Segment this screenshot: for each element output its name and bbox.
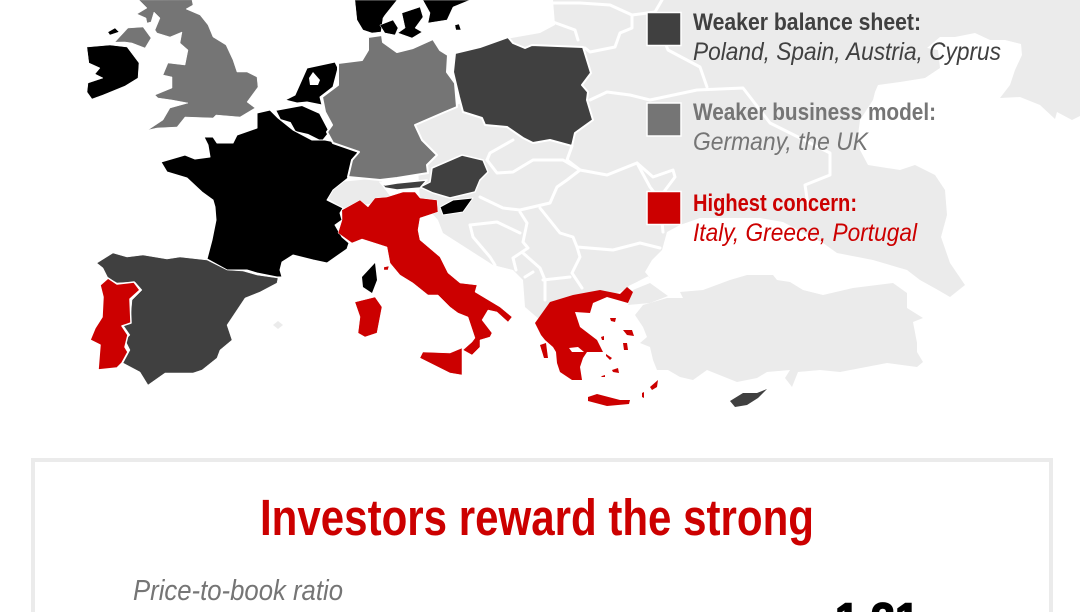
country: Poland — [453, 37, 593, 146]
panel: investors reward the strong — [33, 460, 1051, 612]
country: Portugal — [90, 278, 140, 370]
panel heading: Investors reward the strong — [260, 489, 814, 546]
inland water: IJsselmeer — [309, 72, 320, 85]
country: Cyprus — [730, 389, 767, 407]
country: Austria — [380, 155, 488, 198]
white internal borders — [470, 0, 830, 300]
country: United Kingdom — [115, 0, 258, 130]
legend item: highest concern: Italy, Greece, Portugal — [693, 219, 918, 247]
legend item: weaker business model — [647, 99, 936, 156]
legend item: highest concern: Highest concern: — [693, 190, 857, 217]
country: Germany — [322, 35, 457, 180]
legend item: highest concern — [647, 190, 918, 247]
legend item: weaker business model: Germany, the UK — [693, 128, 869, 156]
legend — [647, 9, 1001, 247]
map of Europe — [87, 0, 1080, 407]
chart label: Price-to-book ratio — [133, 575, 343, 607]
country: Italy — [338, 192, 512, 375]
legend item: weaker balance sheet: Weaker balance sheet: — [693, 9, 921, 36]
country: Greece — [535, 287, 658, 406]
legend item: weaker balance sheet — [647, 9, 1001, 66]
island: Corsica — [362, 263, 377, 293]
legend item: weaker balance sheet: Poland, Spain, Austria, Cyprus — [693, 38, 1001, 66]
country: France — [161, 110, 358, 277]
country: Netherlands — [285, 62, 338, 105]
country: Belgium — [275, 105, 330, 142]
country: Spain — [97, 253, 278, 385]
unrated countries landmass — [273, 0, 1080, 387]
country: Ireland and Scandinavia group — [87, 0, 470, 99]
legend item: weaker business model: Weaker business model: — [693, 99, 936, 126]
country: Slovenia — [440, 198, 473, 215]
